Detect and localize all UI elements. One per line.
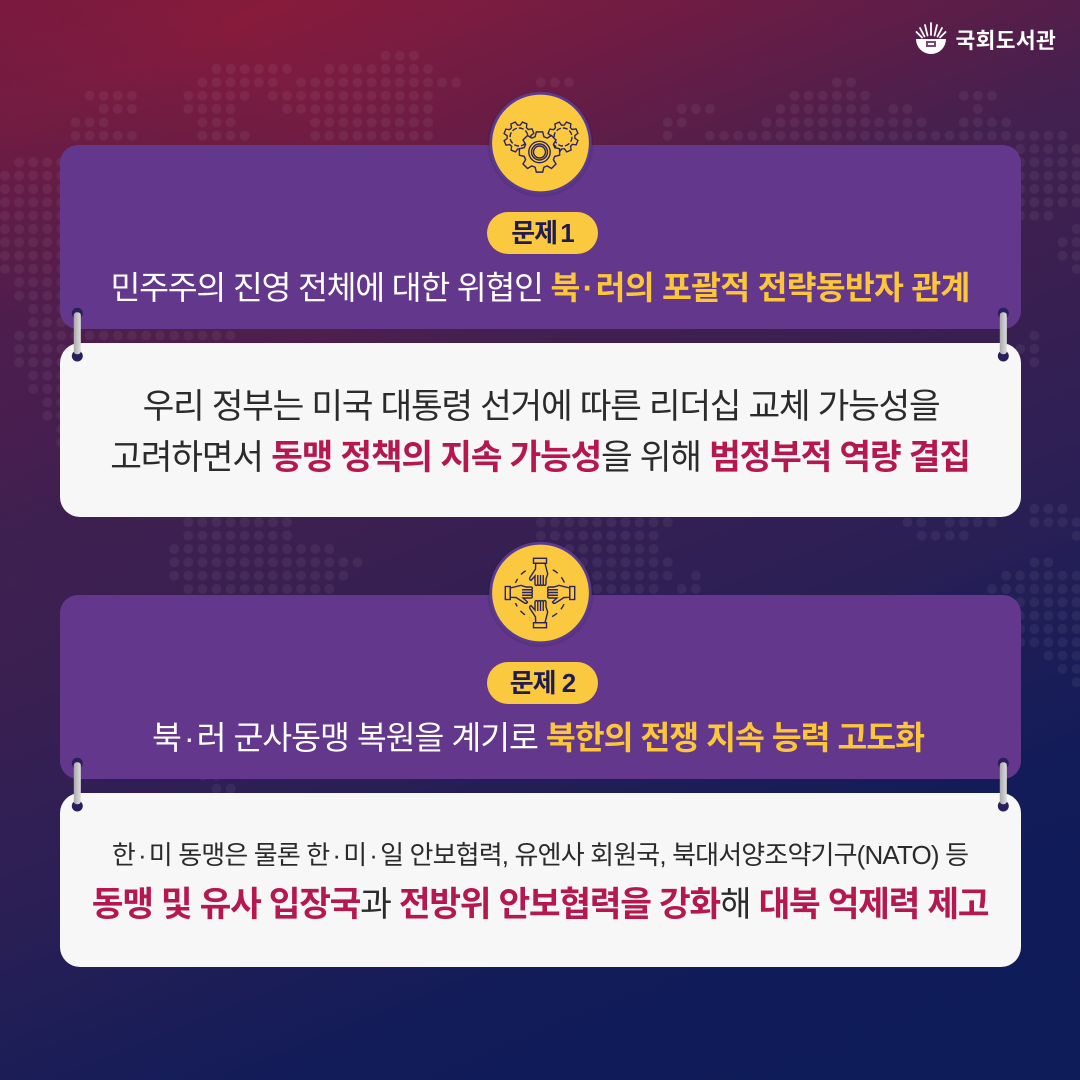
logo: National Assembly Library: 국회도서관 [956, 29, 1056, 53]
text block: answer 1 [110, 388, 970, 477]
text block: answer 1: 우리 정부는 미국 대통령 선거에 따른 리더십 교체 가능성을 [143, 388, 939, 426]
badge label: problem 1 [487, 212, 598, 254]
text block: answer 2 [92, 840, 988, 924]
panel: problem 1 answer [60, 343, 1021, 517]
text block: answer 1: 고려하면서 동맹 정책의 지속 가능성을 위해 범정부적 역량 결집 [110, 439, 970, 477]
badge label: problem 1: 문제 1 [511, 218, 574, 248]
heading: problem 2: 북·러 군사동맹 복원을 계기로 북한의 전쟁 지속 능력 고도화 [152, 720, 924, 756]
panel: problem 2 answer [60, 793, 1021, 967]
ring connectors [72, 308, 1009, 812]
logo: National Assembly Library [916, 22, 1056, 54]
text block: answer 2: 동맹 및 유사 입장국과 전방위 안보협력을 강화해 대북 억제력 제고 [92, 886, 988, 924]
icon: hands badge [488, 542, 594, 647]
badge label: problem 2: 문제 2 [510, 668, 575, 698]
text block: answer 2: 한·미 동맹은 물론 한·미·일 안보협력, 유엔사 회원국, 북대서양조약기구(NATO) 등 [112, 840, 968, 870]
icon: gears badge [488, 91, 594, 197]
heading: problem 1: 민주주의 진영 전체에 대한 위협인 북·러의 포괄적 전략동반자 관계 [110, 270, 970, 306]
panel: problem 1 header [60, 145, 1021, 329]
panel: problem 2 header [60, 595, 1021, 779]
badge label: problem 2 [487, 662, 598, 704]
